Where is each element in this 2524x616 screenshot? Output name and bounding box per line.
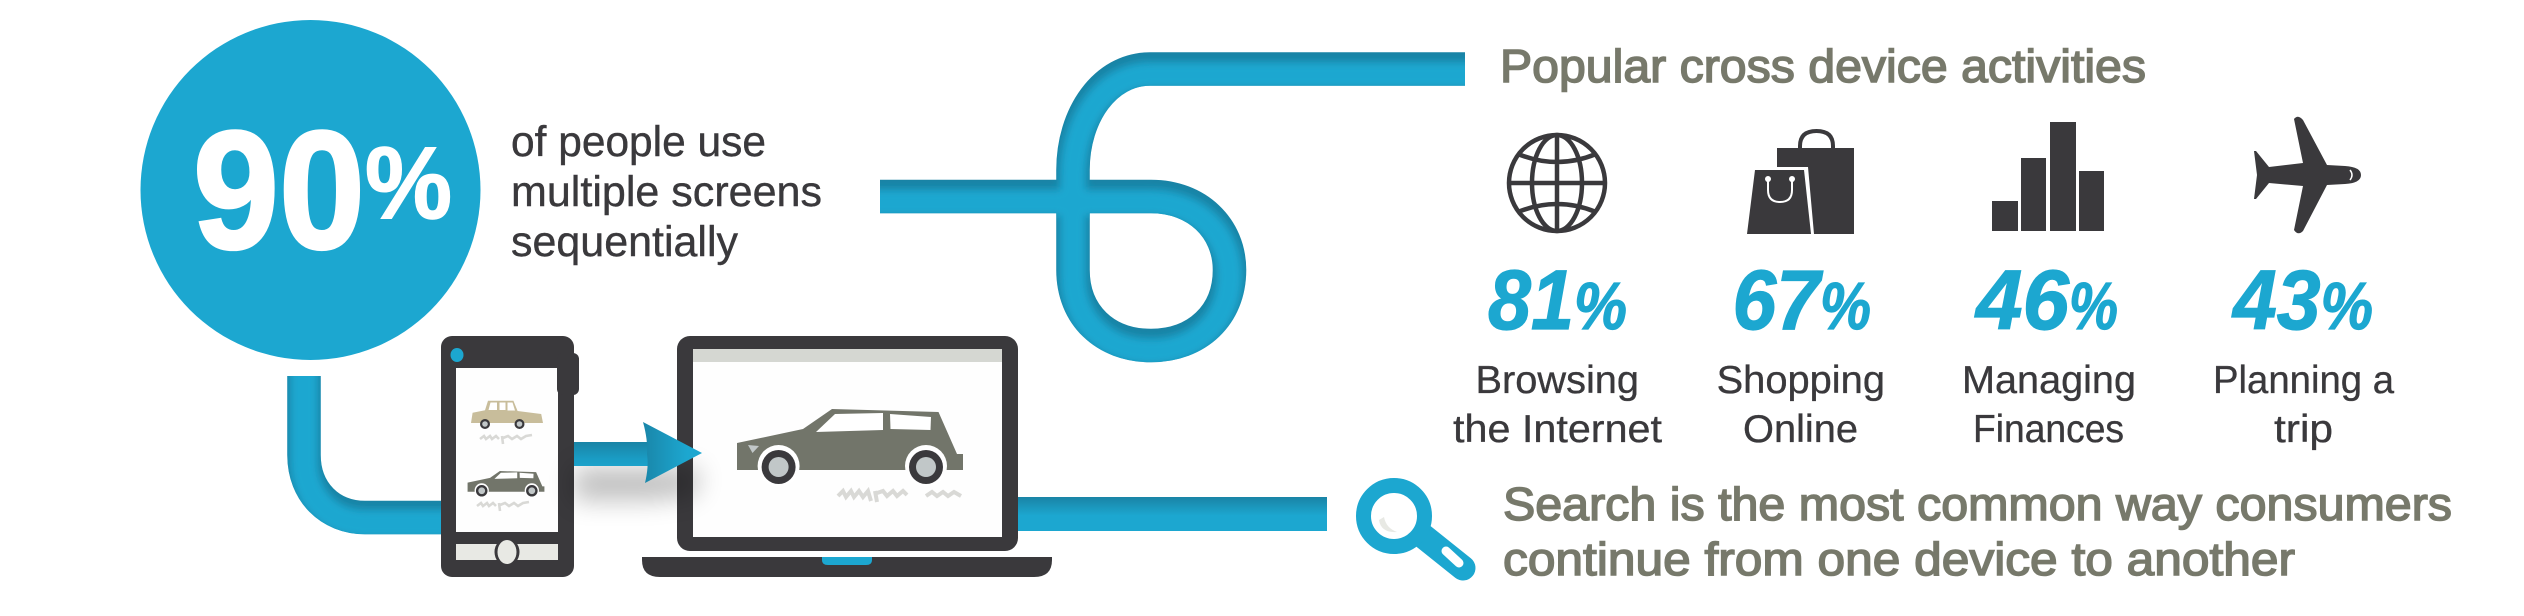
text: of people use multiple screens sequentially: multiple screens (511, 168, 822, 216)
activity: planning a trip: % (2321, 269, 2373, 344)
text: search callout: continue from one device to another (1503, 533, 2295, 585)
activity: browsing the internet (1453, 135, 1662, 451)
text: of people use multiple screens sequentially: of people use (511, 118, 766, 166)
activity: planning a trip: trip (2274, 408, 2333, 451)
text: of people use multiple screens sequentially (511, 118, 822, 266)
big stat circle: 90%: % (365, 126, 452, 240)
phone (441, 336, 579, 577)
activity: planning a trip (2213, 117, 2394, 451)
arrow shadow (574, 468, 700, 500)
text: of people use multiple screens sequentially: sequentially (511, 218, 738, 266)
activity: shopping online (1717, 131, 1885, 451)
big stat circle: 90% (140, 20, 480, 360)
activity: planning a trip: 43 (2231, 253, 2321, 347)
activity: managing finances: Finances (1973, 408, 2124, 451)
icon: bar chart (1992, 122, 2104, 231)
activity: managing finances (1962, 122, 2136, 451)
icon: globe (1509, 135, 1605, 231)
car: large olive wagon (737, 409, 963, 487)
activity: browsing the internet: 81 (1488, 253, 1574, 347)
laptop (642, 336, 1052, 577)
text: search callout: Search is the most common way consumers (1503, 478, 2452, 530)
icon: magnifying glass (1364, 486, 1463, 568)
activity: planning a trip: Planning a (2213, 359, 2394, 402)
ribbon: loop connector (860, 69, 1490, 352)
activity: shopping online: 67 (1732, 253, 1823, 347)
activity: shopping online: Online (1743, 408, 1858, 451)
activity: shopping online: % (1820, 269, 1871, 344)
activity: browsing the internet: % (1574, 269, 1627, 344)
car: small beige sedan (471, 401, 543, 429)
activity: managing finances: 46 (1974, 253, 2070, 347)
icon: airplane (2254, 117, 2361, 233)
ribbon: laptop to search connector (1010, 497, 1327, 531)
ribbon: circle to phone connector (287, 376, 441, 534)
activity: managing finances: Managing (1962, 359, 2136, 402)
activity: browsing the internet: the Internet (1453, 408, 1662, 451)
activity: managing finances: % (2069, 269, 2118, 344)
car: small olive wagon (468, 471, 544, 498)
activity: browsing the internet: Browsing (1476, 359, 1639, 402)
heading: popular cross device activities: Popular cross device activities (1500, 40, 2146, 92)
arrow: phone to laptop (574, 422, 702, 483)
icon: shopping bags (1747, 131, 1854, 234)
activity: shopping online: Shopping (1717, 359, 1885, 402)
text: search callout (1503, 478, 2452, 585)
big stat circle: 90%: 90 (193, 96, 365, 284)
